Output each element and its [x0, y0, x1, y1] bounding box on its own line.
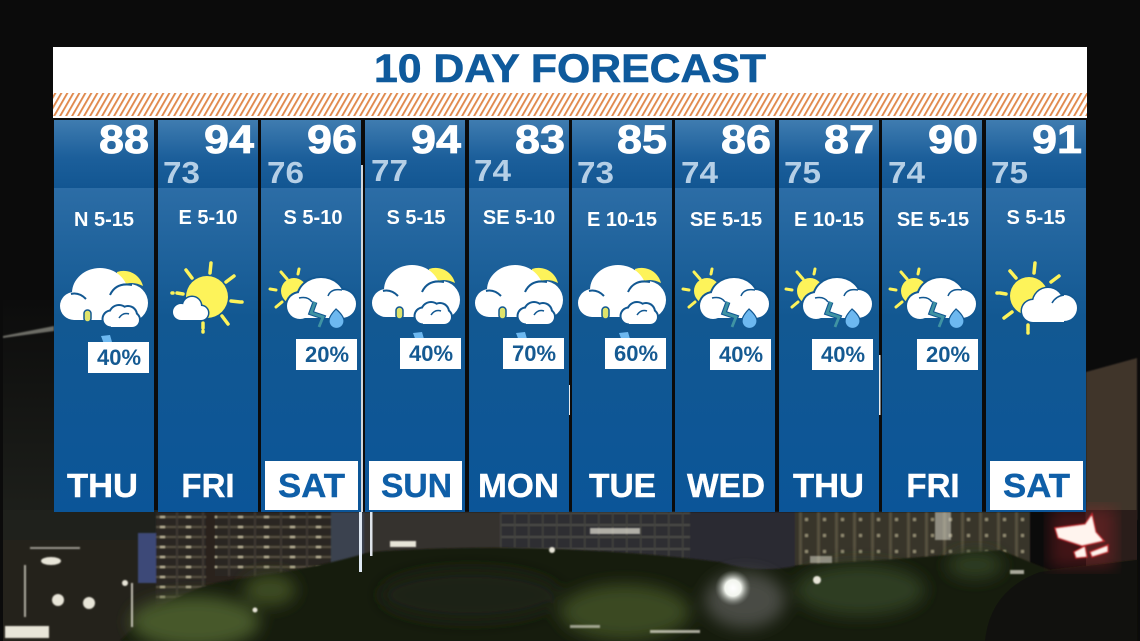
- hatched stripe: [53, 93, 1087, 116]
- forecast day 8: Thursday: 75: [784, 155, 821, 190]
- icon: cloudy with sun and rain: [60, 268, 148, 344]
- forecast day 8: Thursday: THU: [793, 467, 864, 504]
- forecast day 10: Saturday: S 5-15: [1007, 207, 1065, 229]
- forecast day 8: Thursday: 87: [824, 118, 874, 162]
- title banner: [53, 47, 1087, 118]
- forecast day 3: Saturday: 96: [307, 118, 357, 162]
- forecast day 3: Saturday: S 5-10: [284, 207, 342, 229]
- forecast day 9: Friday: [882, 118, 982, 512]
- forecast day 4: Sunday: S 5-15: [387, 207, 445, 229]
- icon: sun, storm and rain: [786, 269, 874, 329]
- forecast day 2: Friday: FRI: [181, 467, 235, 504]
- forecast day 7: Wednesday: 86: [721, 118, 771, 162]
- forecast day 1: Thursday: THU: [67, 467, 138, 504]
- forecast day 7: Wednesday: 40%: [719, 342, 763, 367]
- forecast day 2: Friday: E 5-10: [179, 207, 237, 229]
- forecast day 7: Wednesday: WED: [687, 467, 765, 504]
- forecast day 9: Friday: FRI: [906, 467, 960, 504]
- icon: mostly sunny: [172, 263, 242, 332]
- forecast day 2: Friday: 73: [163, 155, 200, 190]
- forecast day 5: Monday: MON: [478, 467, 559, 504]
- icon: sun, storm and rain: [890, 269, 978, 329]
- forecast day 6: Tuesday: E 10-15: [587, 209, 657, 231]
- forecast day 8: Thursday: E 10-15: [794, 209, 864, 231]
- forecast day 2: Friday: 94: [204, 118, 255, 162]
- forecast day 6: Tuesday: [572, 118, 672, 512]
- forecast day 4: Sunday: 77: [371, 153, 408, 188]
- forecast day 10: Saturday: [986, 118, 1086, 512]
- forecast day 9: Friday: SE 5-15: [897, 209, 969, 231]
- icon: sun, storm and rain: [270, 269, 358, 329]
- forecast day 6: Tuesday: TUE: [589, 467, 656, 504]
- icon: cloudy with sun and rain: [372, 265, 460, 341]
- forecast day 1: Thursday: [54, 118, 154, 512]
- forecast day 4: Sunday: 94: [411, 118, 462, 162]
- forecast day 9: Friday: 20%: [926, 342, 970, 367]
- forecast day 3: Saturday: SAT: [278, 467, 345, 504]
- forecast day 7: Wednesday: [675, 118, 775, 512]
- forecast day 6: Tuesday: 85: [617, 118, 667, 162]
- forecast day 9: Friday: 74: [888, 155, 926, 190]
- forecast day 6: Tuesday: 73: [577, 155, 614, 190]
- icon: partly cloudy: [997, 263, 1078, 333]
- forecast day 3: Saturday: 76: [267, 155, 304, 190]
- forecast day 4: Sunday: SUN: [381, 467, 452, 504]
- forecast day 4: Sunday: [365, 118, 465, 512]
- forecast day 7: Wednesday: SE 5-15: [690, 209, 762, 231]
- forecast day 5: Monday: [469, 118, 569, 512]
- forecast day 10: Saturday: 75: [991, 155, 1028, 190]
- forecast day 6: Tuesday: 60%: [614, 341, 658, 366]
- forecast day 3: Saturday: [261, 118, 361, 512]
- forecast day 2: Friday: [158, 118, 258, 512]
- forecast day 5: Monday: SE 5-10: [483, 207, 555, 229]
- forecast day 5: Monday: 74: [474, 153, 512, 188]
- forecast day 1: Thursday: 40%: [97, 345, 141, 370]
- forecast day 5: Monday: 70%: [512, 341, 556, 366]
- icon: cloudy with sun and rain: [475, 265, 563, 341]
- forecast day 5: Monday: 83: [515, 118, 565, 162]
- forecast day 1: Thursday: 88: [99, 118, 149, 162]
- forecast day 8: Thursday: 40%: [821, 342, 865, 367]
- forecast day 9: Friday: 90: [928, 118, 978, 162]
- icon: cloudy with sun and rain: [578, 265, 666, 341]
- forecast day 7: Wednesday: 74: [681, 155, 719, 190]
- icon: sun, storm and rain: [683, 269, 771, 329]
- forecast day 3: Saturday: 20%: [305, 342, 349, 367]
- forecast day 10: Saturday: SAT: [1003, 467, 1070, 504]
- forecast day 4: Sunday: 40%: [409, 341, 453, 366]
- forecast day 10: Saturday: 91: [1032, 118, 1082, 162]
- forecast day 1: Thursday: N 5-15: [74, 209, 134, 231]
- forecast day 8: Thursday: [779, 118, 879, 512]
- title: 10 DAY FORECAST: [374, 47, 766, 91]
